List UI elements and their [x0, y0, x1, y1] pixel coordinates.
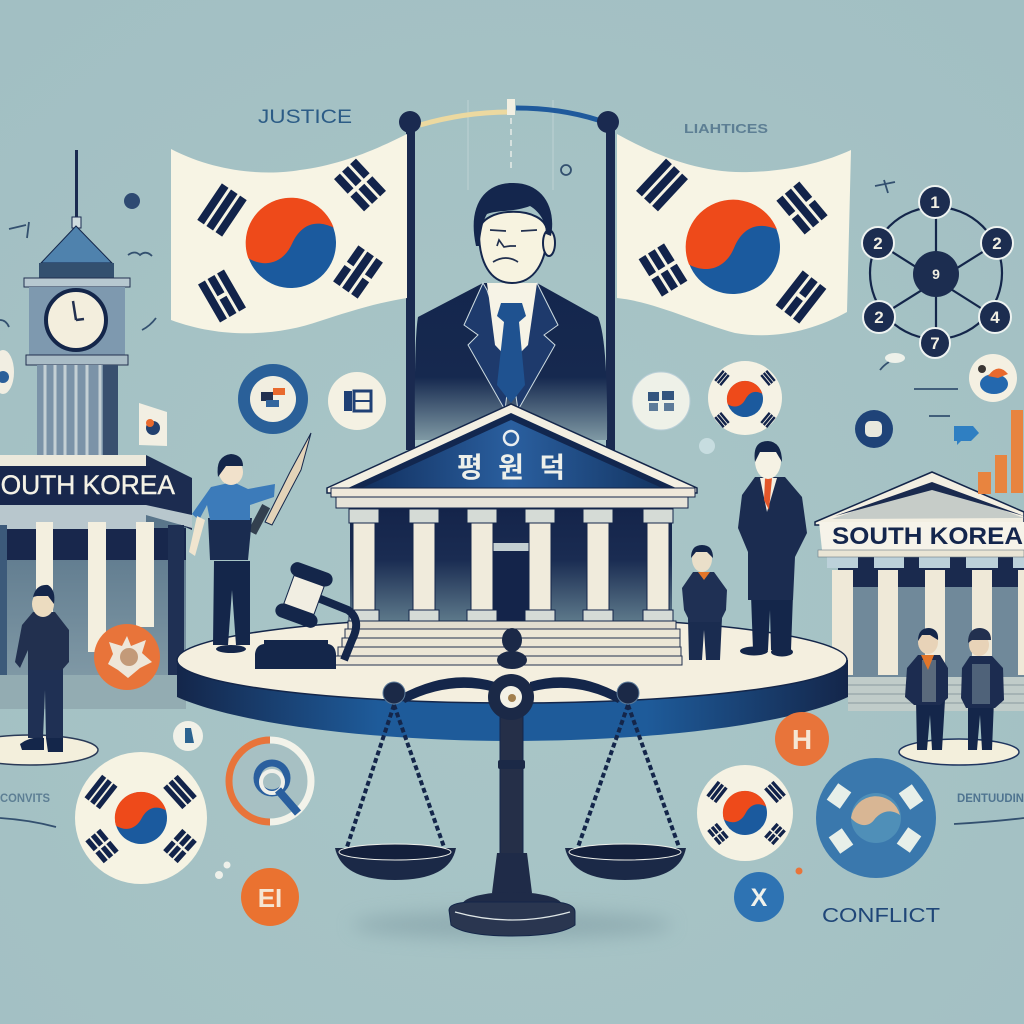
network diagram: 2	[873, 234, 883, 253]
figure: tall man in suit	[738, 441, 807, 656]
flag: right	[617, 134, 851, 335]
figure: small man	[682, 545, 727, 660]
icon: small flag card	[139, 403, 167, 446]
gavel	[255, 560, 356, 669]
badge: orange burst	[94, 624, 160, 690]
badge: orange N: H	[792, 724, 812, 755]
label: conflict: CONFLICT	[822, 905, 940, 927]
figures: two men on right disc	[899, 628, 1019, 765]
icon: small blue oval top left	[124, 193, 140, 209]
badge: orange EI	[241, 868, 299, 926]
central courthouse	[327, 404, 697, 665]
network diagram: 4	[990, 308, 1000, 327]
flag ball: right	[697, 765, 793, 861]
badge: blue X: X	[751, 884, 768, 912]
figure: worker with sword	[189, 433, 311, 653]
badge: orange EI: EI	[258, 883, 282, 913]
building: right hall with SOUTH KOREA sign: SOUTH KOREA	[832, 523, 1023, 550]
network diagram: 9	[932, 266, 940, 282]
circular platform	[177, 617, 848, 741]
building: left clock tower	[24, 150, 130, 457]
flag ball: left	[75, 752, 207, 884]
small scribbles and marks	[0, 100, 1024, 827]
dot: orange	[796, 868, 802, 874]
pediment inscription: 평원덕	[457, 452, 565, 483]
building: right hall with SOUTH KOREA sign	[815, 472, 1024, 711]
central figure: man in suit	[415, 183, 607, 440]
building: left hall with SOUTH KOREA sign	[0, 455, 192, 709]
bar chart: orange bars	[978, 410, 1023, 494]
network diagram: 2	[874, 308, 884, 327]
icon: blue chat	[954, 426, 979, 445]
badge: blue X	[734, 872, 784, 922]
badge: small cream circle	[173, 721, 203, 751]
network diagram: 2	[992, 234, 1002, 253]
icon: partial circle far left	[0, 350, 14, 394]
badge: large blue taegeuk	[816, 758, 936, 878]
network diagram	[862, 186, 1013, 358]
dots	[215, 862, 230, 879]
faded label top right: LIAHTICES	[684, 121, 768, 136]
badge: flag circle top right	[708, 361, 782, 435]
badge: navy circle	[855, 410, 893, 448]
icon: white blob	[885, 353, 905, 363]
badge: cream circle right of temple	[632, 372, 690, 430]
network diagram: 7	[930, 334, 940, 353]
scale shadow	[352, 911, 672, 939]
heading: justice: JUSTICE	[258, 107, 352, 128]
network diagram: 1	[930, 193, 940, 212]
temple columns	[349, 509, 673, 622]
ring icon with magnifier	[229, 740, 311, 822]
balance scale	[335, 628, 686, 936]
icon: pale bubble	[699, 438, 715, 454]
badge: cream circle left of temple	[328, 372, 386, 430]
badge: orange N	[775, 712, 829, 766]
badge: cream circle right	[969, 354, 1017, 402]
flagpoles and wire	[399, 99, 619, 450]
figure: man on left disc	[0, 585, 98, 765]
badge: blue circle with small flag	[238, 364, 308, 434]
flag: left	[171, 134, 407, 333]
faded label left: CONVITS	[0, 791, 50, 805]
